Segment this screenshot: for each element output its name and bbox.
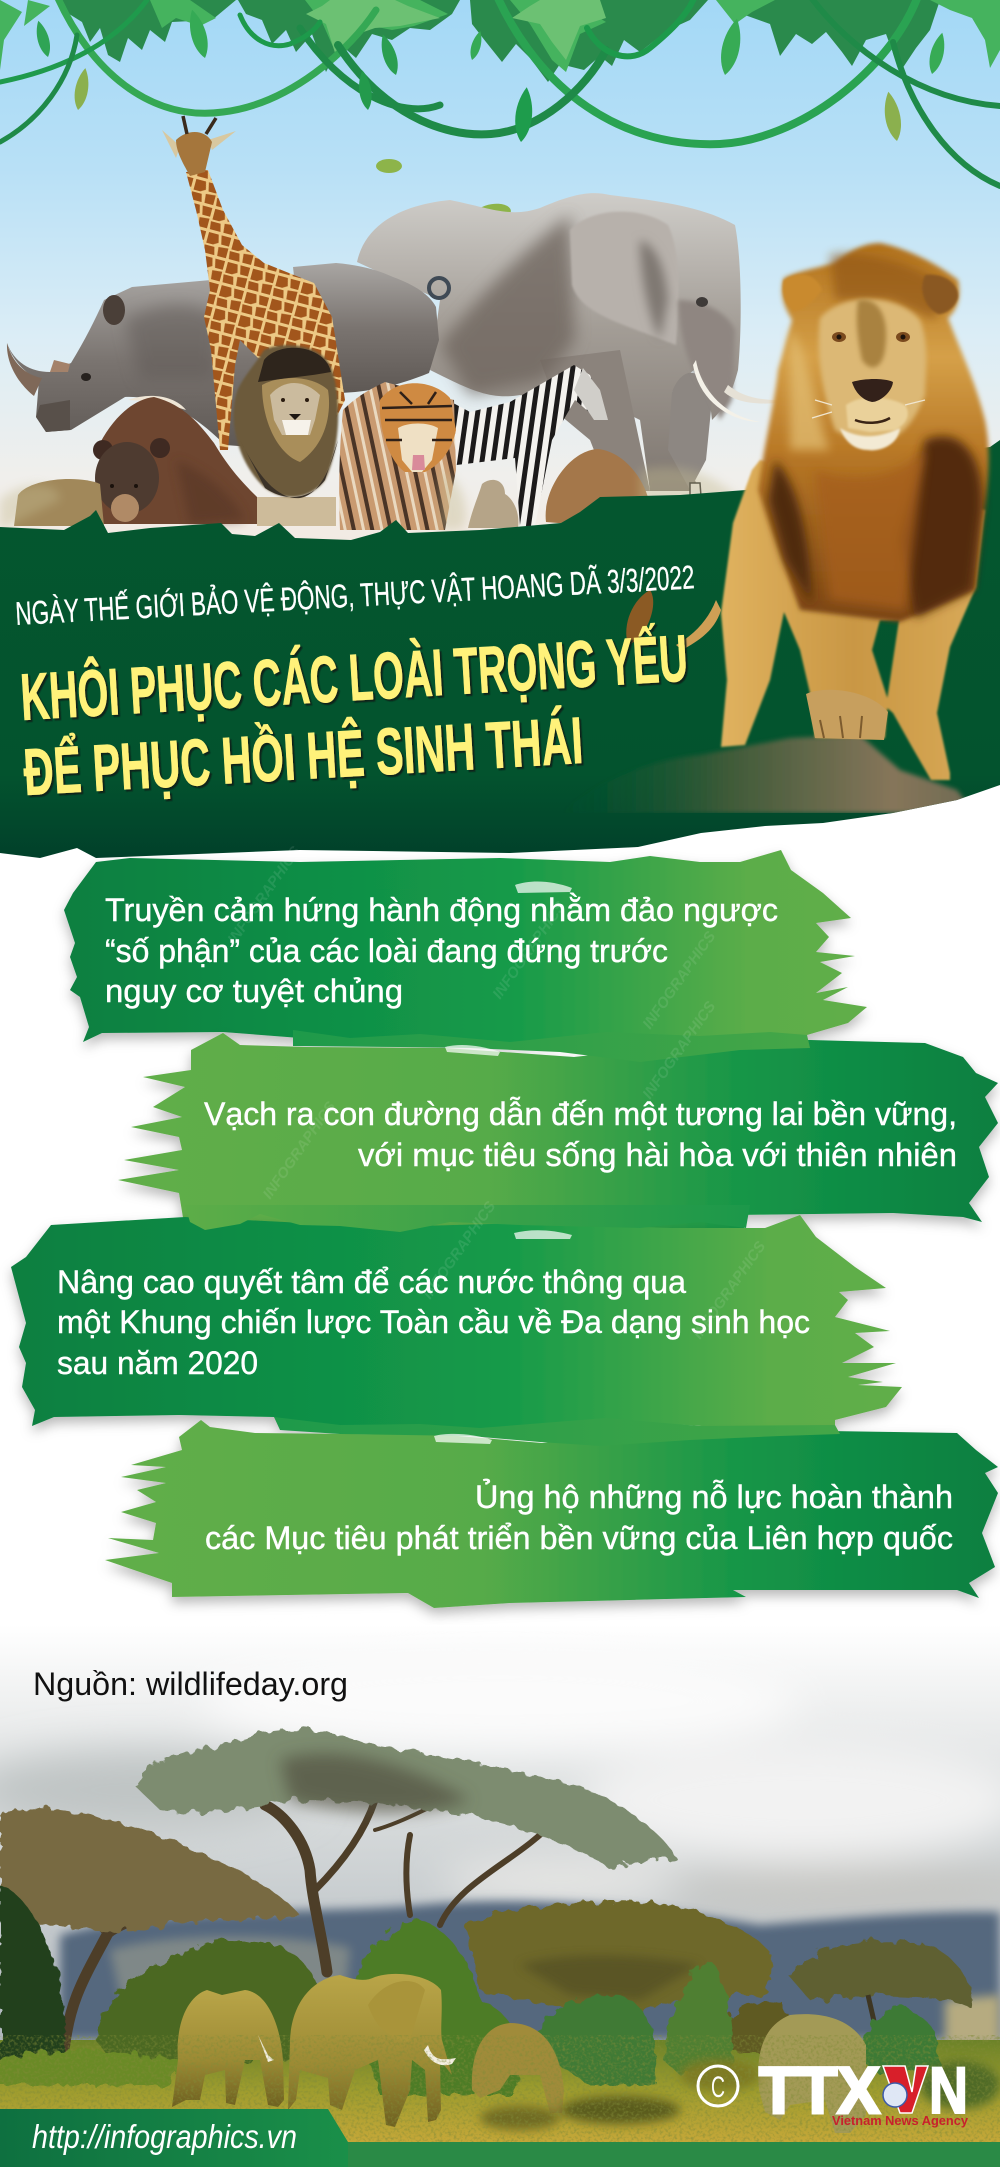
TTXVN logo: Vietnam News Agency [832,2113,969,2128]
lion tail [626,590,721,650]
grass shading [480,2059,1000,2130]
grass under lion [257,497,336,526]
distant mountain [60,1901,1000,2040]
big lion [626,243,989,780]
tiger [339,382,456,530]
watermarks: INFOGRAPHICS [224,843,304,947]
jungle canopy with vines [0,0,1000,224]
vines [0,0,1000,186]
right acacia [788,1941,971,2030]
panel: global biodiversity framework: sau năm 2020 [57,1345,258,1381]
subtitle: event name and date: NGÀY THẾ GIỚI BẢO VỆ ĐỘNG, THỰC VẬT HOANG DÃ 3/3/2022 [14,558,695,632]
panel: UN sustainable development goals [105,1417,998,1608]
footer website tab: http://infographics.vn [32,2118,297,2155]
giraffe [162,116,345,450]
source note: Nguồn: wildlifeday.org [33,1666,348,1702]
left dark tree [0,1885,66,2075]
mid acacias [466,1900,770,2020]
TTXVN logo: N [929,2053,968,2127]
panel: reverse fate of endangered species: “số phận” của các loài đang đứng trước [105,933,668,969]
main title [18,620,690,809]
ground [0,2040,1000,2150]
panel: path to sustainable future [118,1030,998,1230]
lion body and legs [721,460,985,780]
foliage: dark leaf clusters [60,0,940,82]
elephant tail curl [429,278,449,298]
panel: global biodiversity framework: Nâng cao quyết tâm để các nước thông qua [57,1264,686,1300]
foliage: bright leaf clusters [0,0,1000,72]
animal group [0,116,778,530]
tortoise [546,449,650,524]
copyright mark: C [711,2071,725,2104]
watermarks: INFOGRAPHICS [419,1198,499,1302]
panel: reverse fate of endangered species [64,850,867,1043]
grass texture [0,2035,1000,2142]
small bird [690,483,702,513]
rock under lion [612,734,966,813]
left acacia canopy [0,1809,300,1931]
watermarks: INFOGRAPHICS [639,998,719,1102]
panel: reverse fate of endangered species: Truyền cảm hứng hành động nhằm đảo ngược [105,892,778,928]
lion mane [758,243,989,622]
panel: UN sustainable development goals: các Mục tiêu phát triển bền vững của Liên hợp quốc [205,1520,953,1556]
panel: path to sustainable future: với mục tiêu sống hài hòa với thiên nhiên [358,1137,957,1173]
lion ears [783,275,822,312]
big acacia canopy [134,1729,676,1870]
elephant herd [172,1974,866,2133]
mid dark green tree [96,1940,323,2060]
watermarks: INFOGRAPHICS [259,1098,339,1202]
shrubs [720,2002,790,2055]
watermarks: INFOGRAPHICS [489,898,569,1002]
single falling leaves [33,8,948,224]
baboon [468,480,518,528]
lion face [812,299,926,450]
lion in group [234,345,338,498]
header sky [0,0,1000,560]
green title banner [0,440,1000,858]
copyright mark [698,2066,738,2106]
capybara [14,479,104,526]
zebra [440,365,608,526]
foliage: pale star leaves [306,0,606,60]
tusks [693,360,760,422]
panel: UN sustainable development goals: Ủng hộ những nỗ lực hoàn thành [475,1479,953,1515]
watermarks: INFOGRAPHICS [639,928,719,1032]
panel: path to sustainable future: Vạch ra con đường dẫn đến một tương lai bền vững, [204,1096,957,1132]
elephant [357,193,778,491]
footer website tab [0,2109,348,2167]
bottom savanna scene [0,1625,1000,2150]
panel: reverse fate of endangered species: nguy cơ tuyệt chủng [105,973,403,1009]
TTXVN logo: TTX [759,2053,880,2127]
footer green band [0,2142,1000,2167]
panel: global biodiversity framework [11,1205,902,1430]
grass haze [0,467,740,530]
acacia trunks [40,1790,555,2050]
TTXVN logo [759,2053,969,2128]
rhinoceros [7,263,439,450]
cloudy sky [0,1625,1000,2085]
central bush [351,1920,522,2095]
panel: global biodiversity framework: một Khung chiến lược Toàn cầu về Đa dạng sinh học [57,1304,810,1340]
watermarks [224,843,769,1342]
bear [93,396,257,524]
title line 2: ĐỂ PHỤC HỒI HỆ SINH THÁI [22,703,585,809]
watermarks: INFOGRAPHICS [689,1238,769,1342]
